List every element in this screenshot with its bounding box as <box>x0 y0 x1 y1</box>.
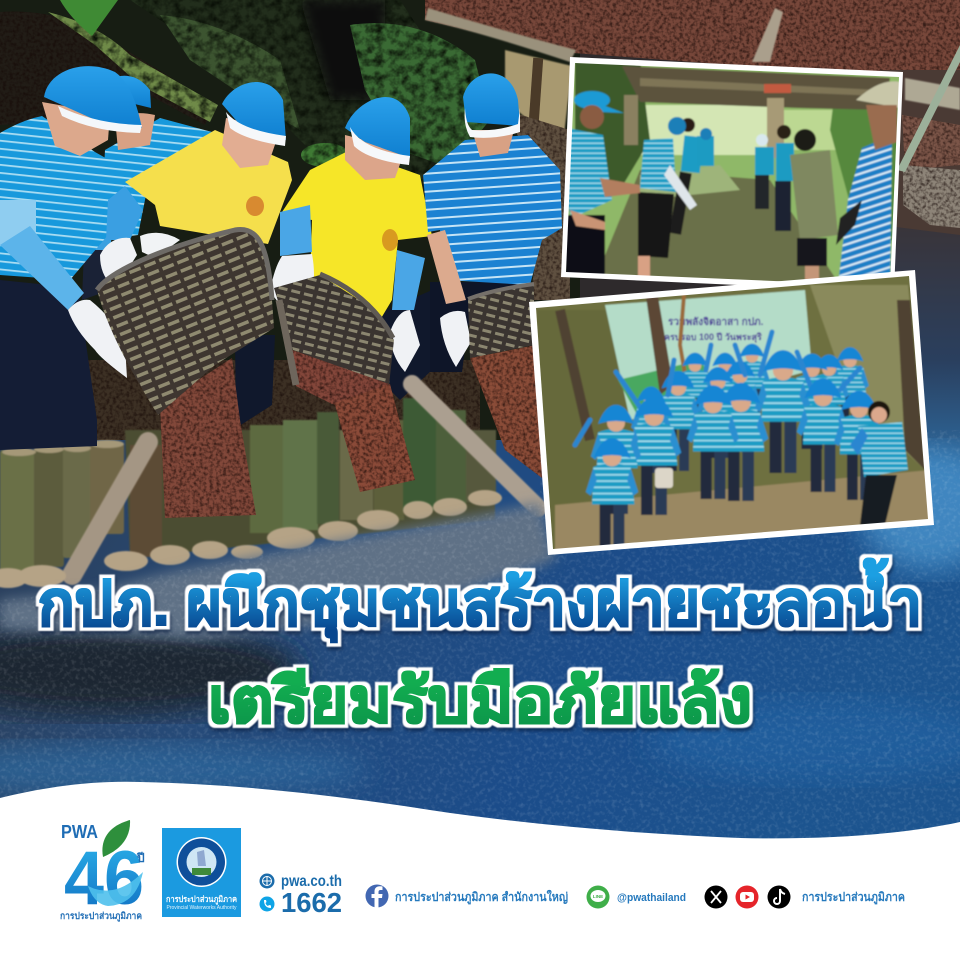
photo 2: group with banner: ครบรอบ 100 ปี วันพระสุริ <box>664 332 762 343</box>
logo: PWA 46 years: 46 <box>64 836 144 921</box>
banner <box>605 290 812 420</box>
logo: Provincial Waterworks Authority: Provincial Waterworks Authority <box>166 905 237 911</box>
stream bed <box>597 170 840 285</box>
footer white wave <box>0 782 960 960</box>
bridge <box>622 66 890 110</box>
logo: PWA 46 years: PWA <box>61 822 98 842</box>
logo: PWA 46 years: การประปาส่วนภูมิภาค <box>60 910 142 923</box>
person 5 blue shirt <box>423 73 562 372</box>
back row <box>834 346 870 418</box>
green leaf <box>60 0 118 36</box>
sunlit trees <box>640 105 770 155</box>
basket 1 <box>97 229 274 415</box>
icon: youtube <box>736 886 758 908</box>
foam water <box>0 503 556 640</box>
photo 1: people under the bridge <box>560 57 905 292</box>
social: facebook: การประปาส่วนภูมิภาค สำนักงานใหญ่ <box>395 889 568 905</box>
cut log row <box>0 490 502 588</box>
title line 1: กปภ. ผนึกชุมชนสร้างฝายชะลอน้ำ <box>38 558 922 642</box>
social: x youtube tiktok <box>704 886 905 908</box>
title <box>38 558 922 736</box>
icon: globe <box>260 874 274 888</box>
woman centre <box>638 117 697 278</box>
title line 2: เตรียมรับมือภัยแล้ง <box>208 667 752 736</box>
right bank <box>880 70 960 235</box>
timber wall <box>505 50 572 135</box>
person 3 yellow shirt <box>100 82 292 428</box>
social: x youtube tiktok: การประปาส่วนภูมิภาค <box>802 890 905 905</box>
mossy bank <box>0 12 215 125</box>
social: line: LINE <box>593 894 603 899</box>
forest backdrop <box>0 0 580 440</box>
soil pouring <box>160 345 542 518</box>
social: line <box>586 886 686 908</box>
main photo: five officials pouring soil <box>0 66 562 640</box>
raised arms <box>575 332 860 445</box>
contact: website and hotline: pwa.co.th <box>281 873 342 890</box>
icon: x <box>704 886 728 908</box>
icon: seal <box>176 837 226 887</box>
water texture <box>0 430 960 845</box>
contact: website and hotline: 1662 <box>281 887 342 918</box>
logo: PWA 46 years: ปี <box>136 851 145 865</box>
soil bank top right <box>425 0 960 78</box>
icon: phone <box>260 896 274 912</box>
front row <box>797 378 849 492</box>
bamboo check dam <box>0 398 496 575</box>
far group <box>669 118 794 235</box>
social: line: @pwathailand <box>617 892 686 904</box>
bamboo front left poles <box>0 440 124 575</box>
basket 3 <box>468 284 534 358</box>
social: facebook <box>366 884 568 908</box>
photo 2: group with banner: รวมพลังจิตอาสา กปภ. <box>668 316 764 328</box>
icon: water swoosh <box>88 872 143 906</box>
logs <box>72 384 538 575</box>
contact: website and hotline <box>260 873 342 918</box>
base backdrop <box>580 54 737 298</box>
icon: tiktok <box>768 886 790 908</box>
person 4 yellow shirt <box>270 97 432 400</box>
person 2 behind <box>82 76 212 300</box>
tree trunks <box>646 296 673 395</box>
basket 2 <box>274 274 394 404</box>
icon: green leaf <box>102 820 130 857</box>
photo 2: group with banner <box>529 270 934 555</box>
logo: Provincial Waterworks Authority <box>162 828 241 917</box>
man left <box>565 91 640 278</box>
logo: Provincial Waterworks Authority: การประปาส่วนภูมิภาค <box>166 894 237 905</box>
person 1 left <box>0 66 142 450</box>
man in khaki <box>790 129 838 288</box>
bamboo back wall <box>125 430 495 558</box>
ground behind check dam <box>85 360 480 440</box>
man right <box>836 81 900 292</box>
water background <box>0 430 960 850</box>
